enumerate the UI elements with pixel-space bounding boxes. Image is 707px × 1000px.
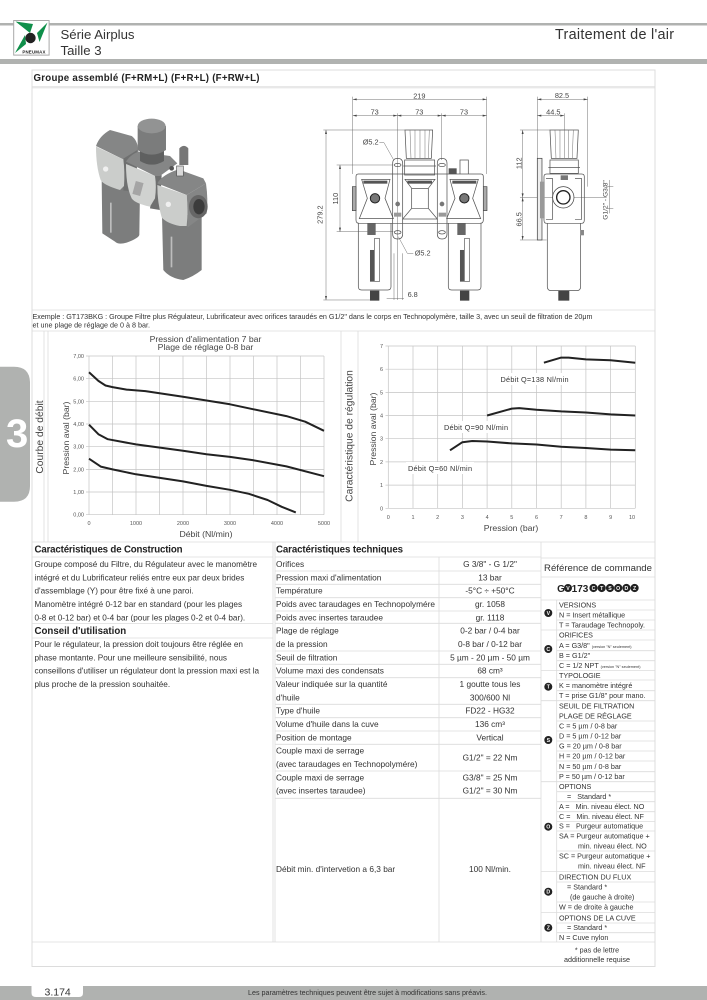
conseil text [34, 640, 260, 689]
dimensions front view: Ø5.2 [363, 138, 379, 147]
x ticks: 5 [510, 515, 513, 521]
order options text: OPTIONS DE LA CUVE [559, 914, 636, 922]
chart: flow curve [61, 334, 330, 539]
order options text: W = de droite à gauche [559, 902, 634, 912]
values column: 68 cm³ [477, 666, 503, 676]
conseil text: phase montante. Pour une meilleure sensibilité, nous [34, 653, 227, 662]
chart title: Pression d'alimentation 7 bar [150, 334, 261, 344]
labels column: Volume d'huile dans la cuve [276, 719, 379, 729]
labels column: Valeur indiquée sur la quantité [276, 679, 388, 689]
y ticks: 6,00 [73, 377, 84, 383]
page number tab [32, 986, 83, 998]
labels column: Seuil de filtration [276, 652, 338, 662]
order options text: N = Cuve nylon [559, 933, 608, 942]
x ticks: 4000 [271, 521, 283, 527]
assembly brackets [393, 158, 447, 239]
x ticks: 3000 [224, 521, 236, 527]
construction text: intégré et du Lubrificateur reliés entre eux par deux brides [34, 573, 244, 582]
order options text: C = 5 µm / 0-8 bar [559, 722, 618, 730]
values column: 0-8 bar / 0-12 bar [458, 639, 522, 649]
y ticks: 2,00 [73, 467, 84, 473]
technical drawing: side view: 44.5 [546, 108, 560, 117]
panel heading: Groupe assemblé (F+RM+L) (F+R+L) (F+RW+L) [34, 73, 260, 84]
y ticks: 3 [380, 437, 383, 443]
group bullets: T [547, 685, 551, 691]
axis titles: Pression (bar) [484, 523, 538, 533]
chart title [150, 334, 261, 352]
axis titles [61, 401, 233, 539]
order options text: OPTIONS [559, 782, 592, 791]
order code [557, 584, 639, 595]
row lines [32, 557, 273, 638]
order options text: T = prise G1/8" pour mano. [559, 691, 646, 700]
x ticks [87, 521, 330, 527]
y ticks: 0 [380, 506, 383, 512]
labels column: Débit min. d'intervetion a 6,3 bar [276, 864, 395, 874]
group bullets: V [547, 611, 551, 617]
labels column: Couple maxi de serrage [276, 746, 364, 756]
order options text: TYPOLOGIE [559, 671, 601, 680]
y ticks: 7,00 [73, 354, 84, 360]
order options text: G = 20 µm / 0-8 bar [559, 742, 622, 750]
construction text [34, 560, 257, 622]
y ticks: 0,00 [73, 513, 84, 519]
table rules [275, 542, 541, 942]
x ticks: 1000 [130, 521, 142, 527]
x ticks: 4 [486, 515, 489, 521]
dimensions front view: 110 [331, 193, 340, 204]
labels column: Plage de réglage [276, 626, 339, 636]
y ticks: 4,00 [73, 422, 84, 428]
footer band [0, 986, 707, 1000]
order options text: D = 5 µm / 0-12 bar [559, 732, 622, 740]
order options text: = Standard * [567, 923, 607, 932]
group bullets: O [546, 825, 550, 831]
dimensions front view: 73 [460, 108, 468, 117]
labels column: Type d'huile [276, 706, 320, 716]
dimensions front view: 279.2 [316, 205, 325, 224]
y ticks: 1 [380, 483, 383, 489]
order options text: = Standard * [567, 792, 611, 801]
dimensions front view: Ø5.2 [415, 249, 431, 258]
labels column: Couple maxi de serrage [276, 772, 364, 782]
page number tab: 3.174 [44, 986, 71, 998]
construction text: 0-8 et 0-12 bar) et 0-4 bar (pour les plages 0-2 et 0-4 bar). [34, 613, 245, 622]
order rules [541, 558, 655, 942]
conseil text: conseillons d'utiliser un régulateur dont la pression maxi est la [34, 667, 260, 676]
axis titles: Pression aval (bar) [61, 401, 71, 474]
grid [86, 356, 324, 515]
values column [450, 559, 530, 874]
values column: G1/2" = 22 Nm [463, 752, 517, 762]
y ticks: 1,00 [73, 490, 84, 496]
x ticks: 9 [609, 515, 612, 521]
curves [89, 372, 324, 512]
values column: gr. 1118 [476, 612, 505, 622]
values column: 13 bar [478, 572, 502, 582]
values column: G 3/8" - G 1/2" [463, 559, 517, 569]
axis titles: Pression aval (bar) [368, 392, 378, 465]
order options text: SA = Purgeur automatique + [559, 832, 650, 840]
group bullets [544, 609, 552, 932]
section tab 3: 3 [6, 412, 28, 456]
labels column: Position de montage [276, 732, 352, 742]
side label: regulation: Caractéristique de régulation [344, 370, 356, 502]
curve labels: Débit Q=90 Nl/min [444, 423, 508, 432]
table: caracteristiques techniques [275, 542, 541, 942]
y ticks: 5,00 [73, 399, 84, 405]
order heading: Référence de commande [544, 563, 652, 574]
x ticks: 0 [87, 521, 91, 527]
logo [14, 20, 49, 55]
x ticks: 2000 [177, 521, 189, 527]
chart: regulation characteristic [368, 344, 635, 533]
labels column: Poids avec insertes taraudee [276, 612, 383, 622]
curves [450, 358, 635, 450]
order options text: N = 50 µm / 0-8 bar [559, 762, 622, 771]
values column: FD22 - HG32 [465, 706, 515, 716]
header title: Taille 3 [60, 43, 102, 58]
order options text [559, 600, 650, 942]
dimensions front view: 6.8 [408, 290, 418, 299]
labels column: d'huile [276, 692, 300, 702]
technical drawing: side view [514, 91, 613, 301]
x ticks: 2 [436, 515, 439, 521]
construction text: Groupe composé du Filtre, du Régulateur avec le manomètre [34, 560, 257, 569]
order options text: DIRECTION DU FLUX [559, 872, 631, 882]
construction text: Manomètre intégré 0-12 bar en standard (pour les plages [34, 600, 242, 609]
main panel frame [32, 70, 655, 966]
order code: V [566, 586, 570, 592]
group bullets: C [546, 647, 550, 653]
labels column: Poids avec taraudages en Technopolymére [276, 599, 435, 609]
table heading: Caractéristiques techniques [276, 544, 403, 556]
values column: 136 cm³ [475, 719, 505, 729]
order code: G [557, 584, 565, 595]
y ticks [73, 354, 84, 519]
group bullets: Z [547, 926, 551, 932]
order options text: T = Taraudage Technopoly. [559, 620, 645, 630]
x ticks: 1 [411, 515, 415, 521]
grid [386, 346, 635, 508]
panel: reference de commande [541, 558, 655, 964]
order options text: C = 1/2 NPT (version "N" seulement) [559, 661, 641, 670]
order options text: H = 20 µm / 0-12 bar [559, 752, 626, 760]
chart title: Plage de réglage 0-8 bar [158, 342, 253, 352]
order options text: K = manomètre intégré [559, 681, 632, 690]
values column: G3/8" = 25 Nm [463, 772, 517, 782]
dimensions front view [316, 92, 487, 300]
dimensions front view: 73 [371, 108, 379, 117]
header category: Traitement de l'air [555, 27, 674, 43]
x ticks: 5000 [318, 521, 330, 527]
order options text: A = Min. niveau élect. NO [559, 802, 645, 811]
order code: O [616, 586, 620, 592]
heading: Caractéristiques de Construction [34, 544, 183, 556]
labels column: Orifices [276, 559, 304, 569]
y ticks: 6 [380, 367, 383, 373]
y ticks: 7 [380, 344, 383, 350]
values column: 100 Nl/min. [469, 864, 511, 874]
construction text: d'assemblage (Y) pour être fixé à une paroi. [34, 587, 194, 596]
technical drawing: side view: 66.5 [514, 212, 523, 226]
order code: C [592, 586, 596, 592]
order options text: (de gauche à droite) [570, 892, 634, 902]
order code: Z [633, 586, 637, 592]
order options text: SEUIL DE FILTRATION [559, 702, 634, 710]
values column: -5°C ÷ +50°C [465, 586, 515, 596]
curve labels: Débit Q=60 Nl/min [408, 464, 472, 473]
x ticks: 7 [560, 515, 563, 521]
order options text: ORIFICES [559, 630, 593, 640]
order code: T [600, 586, 604, 592]
example note: et une plage de réglage de 0 à 8 bar. [32, 320, 150, 330]
x ticks: 6 [535, 515, 538, 521]
order options text: P = 50 µm / 0-12 bar [559, 772, 625, 781]
technical drawing: side view: 82.5 [555, 91, 569, 100]
values column: 300/600 Nl [470, 692, 510, 702]
order options text: VERSIONS [559, 600, 596, 610]
y ticks [380, 344, 383, 512]
x ticks: 0 [387, 515, 390, 521]
axis titles: Débit (Nl/min) [179, 529, 233, 539]
labels column: Volume maxi des condensats [276, 666, 384, 676]
y ticks: 4 [380, 414, 383, 420]
technical drawing: side view: G1/2" - G3/8" [602, 180, 609, 220]
values column: 1 goutte tous les [460, 679, 520, 689]
technical drawing: side view: 112 [514, 157, 523, 169]
curve labels: Débit Q=138 Nl/min [500, 375, 568, 384]
order options text: N = Insert métallique [559, 610, 625, 620]
x ticks: 8 [584, 515, 587, 521]
values column: 5 µm - 20 µm - 50 µm [450, 652, 530, 662]
heading conseil: Conseil d'utilisation [34, 626, 126, 637]
labels column: (avec taraudages en Technopolymére) [276, 759, 418, 769]
example note [32, 312, 592, 330]
header band [0, 23, 707, 64]
order code: 173 [572, 584, 589, 595]
labels column [276, 559, 435, 874]
order options text: SC = Purgeur automatique + [559, 852, 650, 860]
header title [60, 27, 135, 58]
labels column: Température [276, 586, 323, 596]
order options text: B = G1/2" [559, 651, 591, 660]
example note: Exemple : GT173BKG : Groupe Filtre plus Régulateur, Lubrificateur avec orifices taraudés en G1/2" dans le corps en Technopolymère, taille 3, avec un seuil de filtration de 20μm [32, 312, 592, 321]
x ticks [387, 515, 635, 521]
labels column: de la pression [276, 639, 328, 649]
product illustration [96, 119, 208, 280]
footer note: Les paramètres techniques peuvent être sujet à modifications sans préavis. [248, 990, 487, 997]
dimensions front view: 73 [415, 108, 423, 117]
x ticks: 10 [629, 515, 635, 521]
order code: S [608, 586, 612, 592]
values column: 0-2 bar / 0-4 bar [460, 626, 520, 636]
technical drawing: front view [316, 92, 487, 301]
labels column: Pression maxi d'alimentation [276, 572, 382, 582]
curve labels [406, 373, 570, 474]
logo: PNEUMAX [22, 50, 46, 54]
knob and collar [403, 130, 468, 175]
body blocks [352, 174, 487, 223]
order options text: PLAGE DE RÉGLAGE [559, 712, 632, 720]
order options text: min. niveau élect. NO [578, 842, 647, 850]
dimensions front view: 219 [413, 92, 425, 101]
order options text: min. niveau élect. NF [578, 862, 646, 870]
conseil text: Pour le régulateur, la pression doit toujours être réglée en [34, 640, 243, 649]
order options text: S = Purgeur automatique [559, 822, 643, 830]
y ticks: 2 [380, 460, 383, 466]
header title: Série Airplus [60, 27, 135, 42]
order options text: A = G3/8" (version "N" seulement) [559, 641, 632, 650]
panel: caracteristiques de construction [32, 544, 273, 689]
footnote: additionnelle requise [564, 955, 630, 964]
y ticks: 3,00 [73, 445, 84, 451]
y ticks: 5 [380, 390, 383, 396]
bowls [358, 223, 481, 301]
order options text: C = Min. niveau élect. NF [559, 812, 644, 821]
side label: courbe de debit: Courbe de débit [35, 400, 46, 474]
footnote [564, 946, 630, 964]
group bullets: D [546, 890, 550, 896]
axis titles [368, 392, 538, 533]
labels column: (avec insertes taraudee) [276, 786, 366, 796]
values column: Vertical [476, 732, 504, 742]
section tab 3 [0, 367, 30, 502]
conseil text: plus proche de la pression souhaitée. [34, 680, 170, 689]
order options text: = Standard * [567, 882, 607, 892]
footnote: * pas de lettre [575, 946, 619, 954]
values column: gr. 1058 [475, 599, 505, 609]
values column: G1/2" = 30 Nm [463, 786, 517, 796]
order code: D [625, 586, 629, 592]
group bullets: S [547, 738, 551, 744]
x ticks: 3 [461, 515, 464, 521]
